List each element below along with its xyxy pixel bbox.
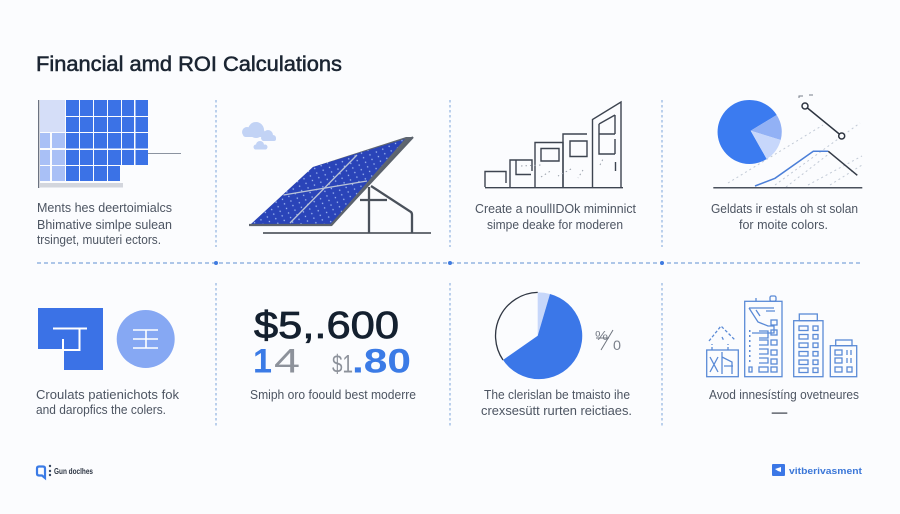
text block: for moite colors.	[739, 218, 828, 232]
footer label: vitberivasment	[789, 466, 863, 477]
footer: right logo	[772, 464, 863, 477]
text block	[475, 202, 637, 232]
text block: and daropfics the colers.	[36, 402, 166, 417]
stepped bar illustration	[485, 102, 623, 188]
icon: chat bubble	[37, 465, 51, 478]
panel: grid chart	[37, 100, 181, 247]
percent mark: %	[595, 328, 608, 343]
secondary figures: .80	[352, 342, 411, 380]
panel: donut pie	[481, 292, 632, 418]
title: Financial amd ROI Calculations	[36, 52, 342, 76]
secondary figures: 4	[274, 342, 300, 380]
pie chart	[718, 100, 782, 164]
text block: Avod innesístíng ovetneures	[709, 388, 859, 402]
line chart	[713, 95, 862, 188]
pie chart	[496, 292, 582, 379]
icon: blue circle	[117, 310, 175, 368]
large figure: $5,.600	[254, 305, 399, 347]
icon: blue square	[38, 308, 103, 370]
text block: Ments hes deertoimialcs	[37, 201, 172, 215]
text block: The clerislan be tmaisto ihe	[484, 388, 630, 402]
text block	[481, 388, 632, 418]
text block	[37, 201, 172, 247]
text block: Geldats ir estals oh st solan	[711, 202, 858, 216]
panel: money figures	[250, 305, 416, 402]
icon: clouds	[242, 122, 276, 150]
text block: Create a noullIDOk miminnict	[475, 202, 637, 216]
percent mark	[595, 328, 621, 353]
text block: Croulats patienichots fok	[36, 387, 179, 402]
solar panel illustration	[249, 137, 431, 233]
footer: left logo	[37, 465, 93, 478]
grid chart graphic	[38, 100, 181, 188]
panel: stepped bars	[475, 102, 637, 232]
panel: solar panel	[242, 122, 431, 233]
panel: square and circle icons	[36, 308, 179, 417]
text block: trsinget, muuteri ectors.	[37, 232, 161, 247]
text block	[711, 202, 858, 232]
text block: simpe deake for moderen	[487, 218, 623, 232]
text block	[36, 387, 179, 417]
text block: Smiph oro foould best moderre	[250, 388, 416, 402]
panel: buildings	[707, 296, 859, 414]
panel: pie and line chart	[711, 95, 862, 232]
icon: blue badge	[772, 464, 785, 476]
footer label: Gun doclhes	[54, 467, 93, 476]
secondary figures: $1	[332, 350, 353, 378]
text block: crexsesütt rurten reictiaes.	[481, 404, 632, 418]
buildings illustration	[707, 296, 857, 377]
text block: Bhimative simlpe sulean	[37, 218, 172, 232]
percent mark: 0	[613, 337, 621, 353]
secondary figures	[253, 342, 411, 380]
secondary figures: 1	[253, 342, 272, 380]
